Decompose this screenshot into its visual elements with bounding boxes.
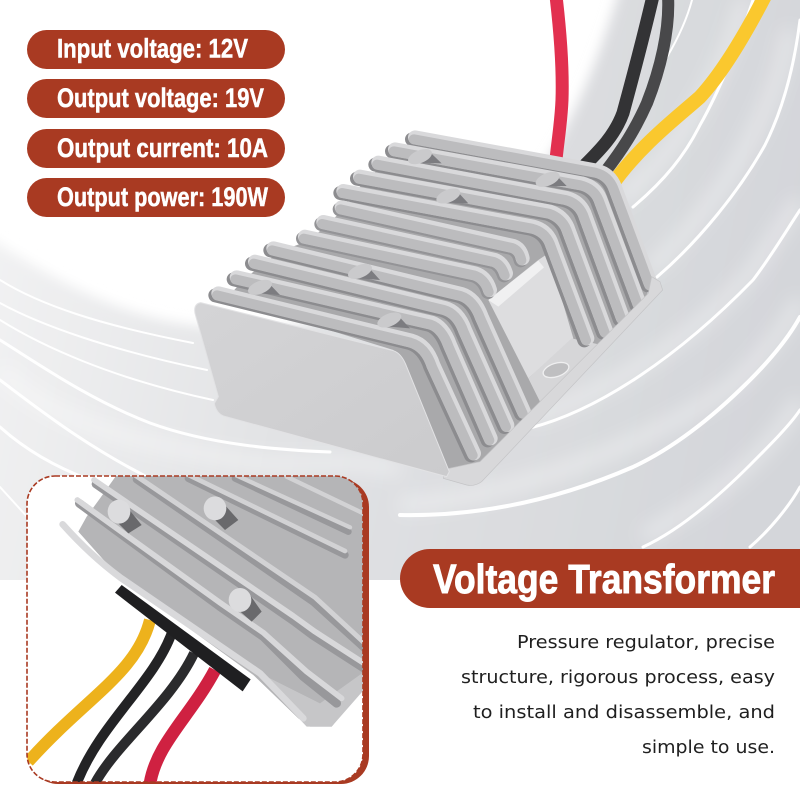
short fins middle group <box>303 207 523 292</box>
spec pills <box>27 30 285 217</box>
wires: top of main converter <box>555 0 765 185</box>
mounting tab with hole <box>528 338 602 405</box>
pill: output current <box>27 129 285 168</box>
description text: structure, rigorous process, easy <box>461 668 775 688</box>
inset lower corner highlight <box>270 674 363 727</box>
background swirl <box>0 0 800 610</box>
pill: input voltage <box>27 30 285 69</box>
inset wires <box>28 620 215 783</box>
description text <box>461 633 775 758</box>
inset photo of connector end <box>28 474 367 783</box>
white area below swirl <box>0 580 800 800</box>
inset device body <box>78 475 367 727</box>
long fins back group <box>340 137 651 340</box>
inset fins <box>63 474 367 718</box>
body block <box>227 140 648 473</box>
inset detail panel <box>27 474 369 784</box>
main converter heatsink <box>195 137 663 485</box>
inset connector block <box>115 585 251 691</box>
description text: to install and disassemble, and <box>473 703 775 723</box>
description text: Pressure regulator, precise <box>517 633 775 653</box>
pill: input voltage: Input voltage: 12V <box>57 34 248 64</box>
front plate <box>195 303 449 477</box>
inset pegs <box>108 496 262 622</box>
pill: output power <box>27 178 285 217</box>
long fins front group <box>215 248 524 455</box>
pill: output voltage <box>27 79 285 118</box>
pill: output power: Output power: 190W <box>57 182 268 212</box>
pill: output voltage: Output voltage: 19V <box>57 83 264 113</box>
flange base <box>443 277 663 485</box>
pill: output current: Output current: 10A <box>57 133 268 163</box>
pegs on fins <box>246 146 567 331</box>
centre block face <box>488 253 573 378</box>
description text: simple to use. <box>642 738 775 758</box>
